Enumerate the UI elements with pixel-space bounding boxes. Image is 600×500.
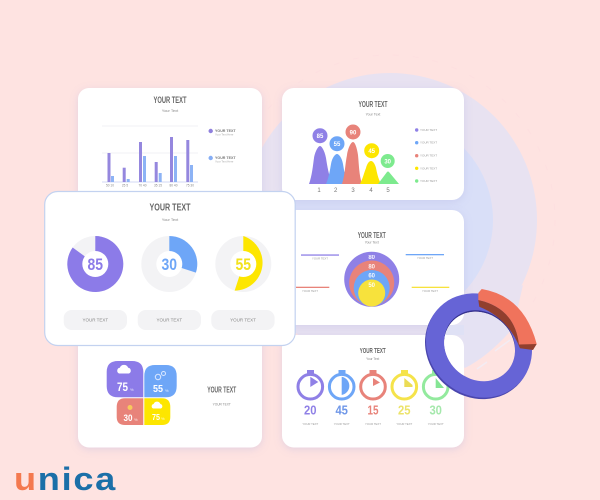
peak chart: 4 <box>369 188 373 194</box>
stopwatch: 30 <box>423 370 448 426</box>
chart legend: YOUR TEXT <box>420 154 437 158</box>
label pill 1 <box>64 310 127 330</box>
callout lines <box>296 254 449 293</box>
panel: bar chart card <box>78 88 262 218</box>
subheading: clover: YOUR TEXT <box>213 402 231 406</box>
donut: 85 <box>67 236 123 292</box>
peak chart: 45 <box>368 149 376 155</box>
chart legend: YOUR TEXT <box>420 166 437 170</box>
background circles <box>225 55 555 385</box>
stopwatch: 30: YOUR TEXT <box>428 422 444 426</box>
stopwatch: 20 <box>298 370 323 426</box>
panel: stopwatch card <box>282 335 464 448</box>
peak chart <box>309 124 399 194</box>
peak chart: 85 <box>317 134 324 140</box>
icon: small cloud <box>152 402 162 408</box>
panel: peak chart card <box>282 88 464 200</box>
stopwatch: 15: YOUR TEXT <box>365 422 381 426</box>
concentric circles chart <box>344 252 399 307</box>
clover chart: 55 <box>153 383 163 395</box>
donut: 55: 55 <box>236 255 251 274</box>
bar chart: 80 40 <box>170 184 178 188</box>
stopwatch: 45: 45 <box>335 402 348 418</box>
logo: unica <box>14 461 117 497</box>
stopwatch: 45: YOUR TEXT <box>334 422 350 426</box>
heading: peak chart: YOUR TEXT <box>358 100 388 109</box>
panel: concentric circles card <box>282 210 464 325</box>
callout lines: YOUR TEXT <box>312 256 328 260</box>
peak chart: 5 <box>386 188 390 194</box>
icon: gears <box>155 372 166 380</box>
scene visible through ring hole <box>444 312 515 382</box>
stopwatch: 25: YOUR TEXT <box>396 422 413 426</box>
heading: clover: YOUR TEXT <box>207 386 236 394</box>
clover chart: 75 <box>117 380 128 394</box>
stopwatch: 20: 20 <box>304 402 317 418</box>
chart legend: YOUR TEXT <box>420 141 437 145</box>
clover chart: 30 <box>124 413 132 423</box>
subheading: bar chart: Your Text <box>162 108 179 113</box>
stopwatch: 45 <box>329 370 354 426</box>
stopwatch: 20: YOUR TEXT <box>302 422 319 426</box>
chart legend: YOUR TEXT <box>215 129 236 133</box>
heading: donut charts: YOUR TEXT <box>150 202 190 214</box>
donut: 30 <box>141 236 197 292</box>
subheading: stopwatches: Your Text <box>366 357 379 361</box>
bar chart <box>102 126 198 188</box>
clover chart: % <box>134 417 138 422</box>
peak chart: 90 <box>350 130 357 136</box>
peak chart: 30 <box>384 159 392 165</box>
peak chart: 3 <box>351 188 355 194</box>
bar chart: 35 15 <box>154 184 162 188</box>
chart legend: YOUR TEXT <box>215 156 236 160</box>
chart legend: YOUR TEXT <box>420 179 437 183</box>
3D ring <box>425 289 537 400</box>
bar chart: 25 5 <box>122 184 128 188</box>
callout lines: YOUR TEXT <box>417 256 433 260</box>
subheading: concentric circles: Your Text <box>365 240 379 244</box>
stopwatch: 30: 30 <box>429 402 442 418</box>
panel: donut charts card <box>45 192 295 346</box>
label pill 3 <box>211 310 275 330</box>
callout lines: YOUR TEXT <box>302 289 318 293</box>
clover chart: 75 <box>152 413 160 422</box>
label pill 2 <box>138 310 201 330</box>
stopwatch: 15: 15 <box>368 402 378 418</box>
donut: 30: 30 <box>162 255 177 274</box>
chart legend: Your Text Here <box>215 132 234 136</box>
concentric circles chart: 80 <box>368 264 376 270</box>
stopwatch: 15 <box>361 370 385 426</box>
peak chart: 1 <box>317 188 321 194</box>
heading: stopwatches: YOUR TEXT <box>360 346 386 355</box>
label pill 2: YOUR TEXT <box>156 318 182 323</box>
stopwatch: 25: 25 <box>398 402 411 418</box>
concentric circles chart: 60 <box>368 274 376 280</box>
bar chart: 75 30 <box>186 184 194 188</box>
donut: 85: 85 <box>88 255 103 274</box>
label pill 3: YOUR TEXT <box>230 318 256 323</box>
stopwatch: 25 <box>392 370 417 426</box>
label pill 1: YOUR TEXT <box>82 318 108 323</box>
clover chart: % <box>161 416 165 421</box>
peak chart: 55 <box>334 142 341 148</box>
icon: cloud <box>117 365 131 374</box>
subheading: peak chart: Your Text <box>366 112 380 116</box>
bar chart: 50 10 <box>106 184 114 188</box>
peak chart: 2 <box>334 188 338 194</box>
clover chart: % <box>165 388 169 393</box>
chart legend: YOUR TEXT <box>420 128 437 132</box>
ring red segment <box>478 289 537 350</box>
subheading: donut charts: Your Text <box>162 217 179 222</box>
heading: concentric circles: YOUR TEXT <box>358 231 386 240</box>
chart legend: Your Text Here <box>215 160 234 164</box>
icon: sun <box>128 405 132 410</box>
donut: 55 <box>215 236 271 292</box>
clover chart <box>107 361 177 425</box>
concentric circles chart: 80 <box>368 255 376 261</box>
chart legend <box>415 128 437 183</box>
callout lines: YOUR TEXT <box>422 289 438 293</box>
clover chart: % <box>130 387 134 392</box>
concentric circles chart: 50 <box>368 283 376 289</box>
bar chart: 70 40 <box>139 184 147 188</box>
heading: bar chart: YOUR TEXT <box>154 95 187 105</box>
panel: weather clover card <box>78 330 262 448</box>
chart legend <box>208 129 236 164</box>
